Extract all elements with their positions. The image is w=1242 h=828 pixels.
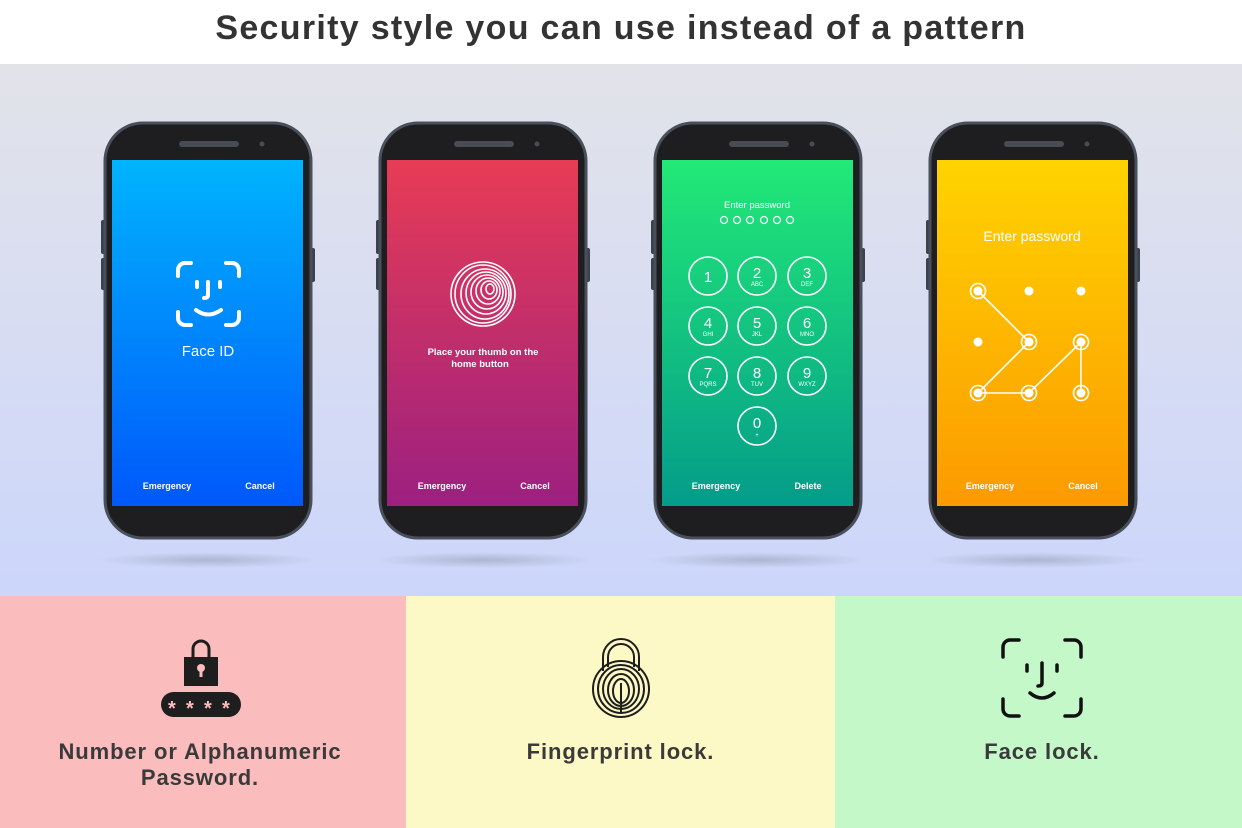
label: password xyxy=(58,739,342,790)
phone 4: pattern: Enter password xyxy=(983,228,1081,244)
phone 1: Face ID: Emergency xyxy=(143,481,191,491)
label: password: Number or Alphanumeric xyxy=(58,739,342,764)
phone 3: pin keypad xyxy=(648,123,868,568)
phone 3: pin keypad: 3 xyxy=(803,265,811,282)
keypad xyxy=(689,257,826,445)
phone 3: pin keypad: 9 xyxy=(803,365,811,382)
icon: face id xyxy=(178,263,239,325)
phone 3: pin keypad: Enter password xyxy=(724,200,790,211)
phone 3: pin keypad: 8 xyxy=(753,365,761,382)
phone 3: pin keypad: 7 xyxy=(704,365,712,382)
phone 2: fingerprint: Cancel xyxy=(520,481,550,491)
phone 3: pin keypad: GHI xyxy=(703,332,714,338)
icon: lock with password xyxy=(161,640,241,719)
phone 4: pattern xyxy=(923,123,1143,568)
phone 3: pin keypad: DEF xyxy=(801,282,813,288)
phone 1: Face ID xyxy=(98,123,318,568)
phone 3: pin keypad: + xyxy=(755,433,759,439)
phone 4: pattern: Cancel xyxy=(1068,481,1098,491)
phone 2: fingerprint: home button xyxy=(451,359,509,370)
icon: fingerprint lock xyxy=(592,638,650,718)
panel: face xyxy=(835,596,1242,828)
phone 3: pin keypad: TUV xyxy=(751,382,763,388)
phone 3: pin keypad: WXYZ xyxy=(798,382,816,388)
phone 3: pin keypad: Emergency xyxy=(692,481,740,491)
phone 2: fingerprint: Emergency xyxy=(418,481,466,491)
phone 1: Face ID: Face ID xyxy=(182,343,234,360)
label: face: Face lock. xyxy=(984,739,1100,764)
phone 3: pin keypad: Delete xyxy=(794,481,822,491)
phone 3: pin keypad: 2 xyxy=(753,265,761,282)
icon: face scan xyxy=(1001,638,1083,718)
phone 3: pin keypad: 4 xyxy=(704,315,712,332)
phone 3: pin keypad: ABC xyxy=(751,282,764,288)
phone 3: pin keypad: PQRS xyxy=(699,382,717,388)
phone 3: pin keypad: 0 xyxy=(753,415,761,432)
label: fingerprint: Fingerprint lock. xyxy=(527,739,714,764)
phone 3: pin keypad: MNO xyxy=(800,332,814,338)
phone 3: pin keypad: 6 xyxy=(803,315,811,332)
phone 1: Face ID: Cancel xyxy=(245,481,275,491)
icon: fingerprint xyxy=(451,262,515,326)
phone 2: fingerprint: Place your thumb on the xyxy=(428,347,538,358)
phone 3: pin keypad: JKL xyxy=(752,332,763,338)
label: password: Password. xyxy=(141,765,259,790)
panel: password xyxy=(0,596,406,828)
title: Security style you can use instead of a pattern xyxy=(215,9,1027,47)
phone 3: pin keypad: 1 xyxy=(704,269,712,286)
phone 3: pin keypad: 5 xyxy=(753,315,761,332)
panel: fingerprint xyxy=(406,596,835,828)
pattern grid xyxy=(970,284,1088,400)
phone 4: pattern: Emergency xyxy=(966,481,1014,491)
phone 2: fingerprint xyxy=(373,123,593,568)
